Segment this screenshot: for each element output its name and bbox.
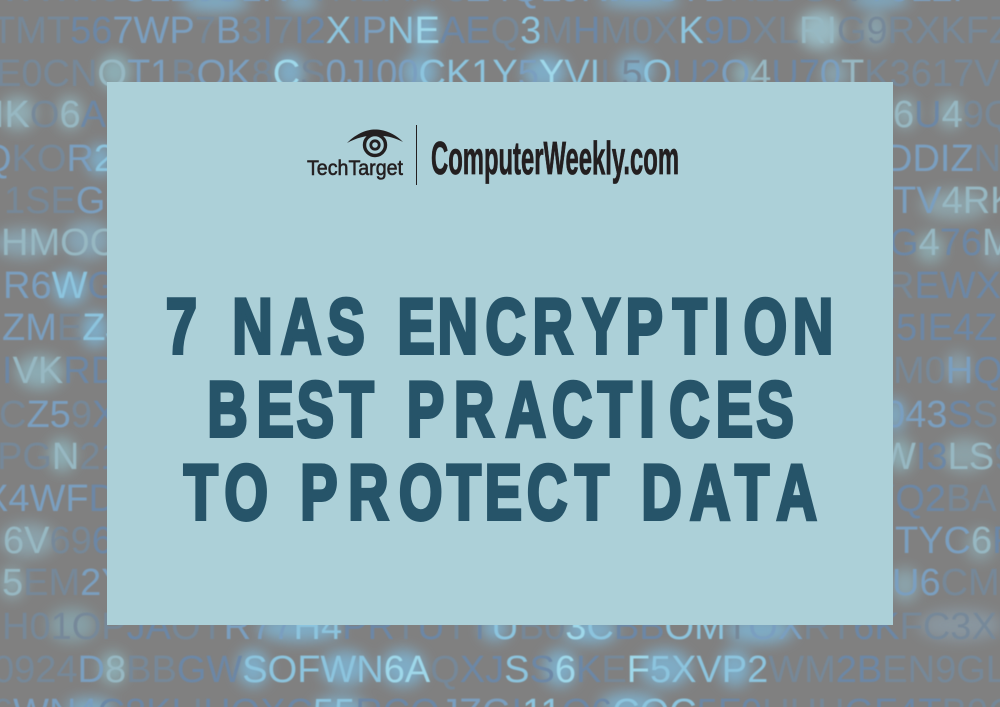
TechTarget wordmark: TechTarget [307, 157, 403, 180]
ComputerWeekly.com wordmark: ComputerWeekly.com [431, 132, 679, 184]
title: 7 NAS ENCRYPTION [166, 284, 833, 370]
background: glowing character matrix: ZMEZJ [2, 307, 124, 349]
background: glowing character matrix: HMOC [1, 222, 117, 264]
background: glowing character matrix: H01OPJAOTR77H4PRTUTTUB03CBBOMTOXRT6KFC3XI [2, 606, 1000, 648]
background: glowing character matrix: 043SS [884, 394, 998, 436]
background: glowing character matrix: IVKRD [2, 350, 118, 392]
background: glowing character matrix: 5EM2Y [2, 562, 127, 604]
background: glowing character matrix: U6CM [892, 562, 1000, 604]
background: glowing character matrix: PGN21 [0, 436, 122, 478]
title: TO PROTECT DATA [184, 450, 817, 536]
background: glowing character matrix: 0924D8BBGWSOFWN6AQXJSS6KEF5XVP2WM2BEN9GL [0, 649, 1000, 691]
logo: TechTarget and ComputerWeekly.com [307, 125, 679, 185]
title [166, 284, 833, 536]
icon: TechTarget eye [347, 130, 403, 156]
background: glowing character matrix: CZ59X [0, 394, 117, 436]
background: glowing character matrix: REWX [887, 265, 1000, 307]
background: glowing character matrix: 1SEGC [4, 180, 133, 222]
background: glowing character matrix: R6WG [3, 265, 117, 307]
background: glowing character matrix: 6V696 [3, 520, 113, 562]
background: glowing character matrix: DDIZN [885, 138, 1000, 180]
background: glowing character matrix: TMT567WP7B3I7I2XIPNEAEQ3MHM0XK9DXLRIG9RXKFZ [0, 10, 1000, 52]
title: BEST PRACTICES [207, 367, 794, 453]
background: glowing character matrix: 5IE4Z [896, 307, 997, 349]
background: glowing character matrix: M0HQ [893, 350, 1000, 392]
divider [416, 125, 417, 185]
background: glowing character matrix: YQ2BA [870, 478, 997, 520]
